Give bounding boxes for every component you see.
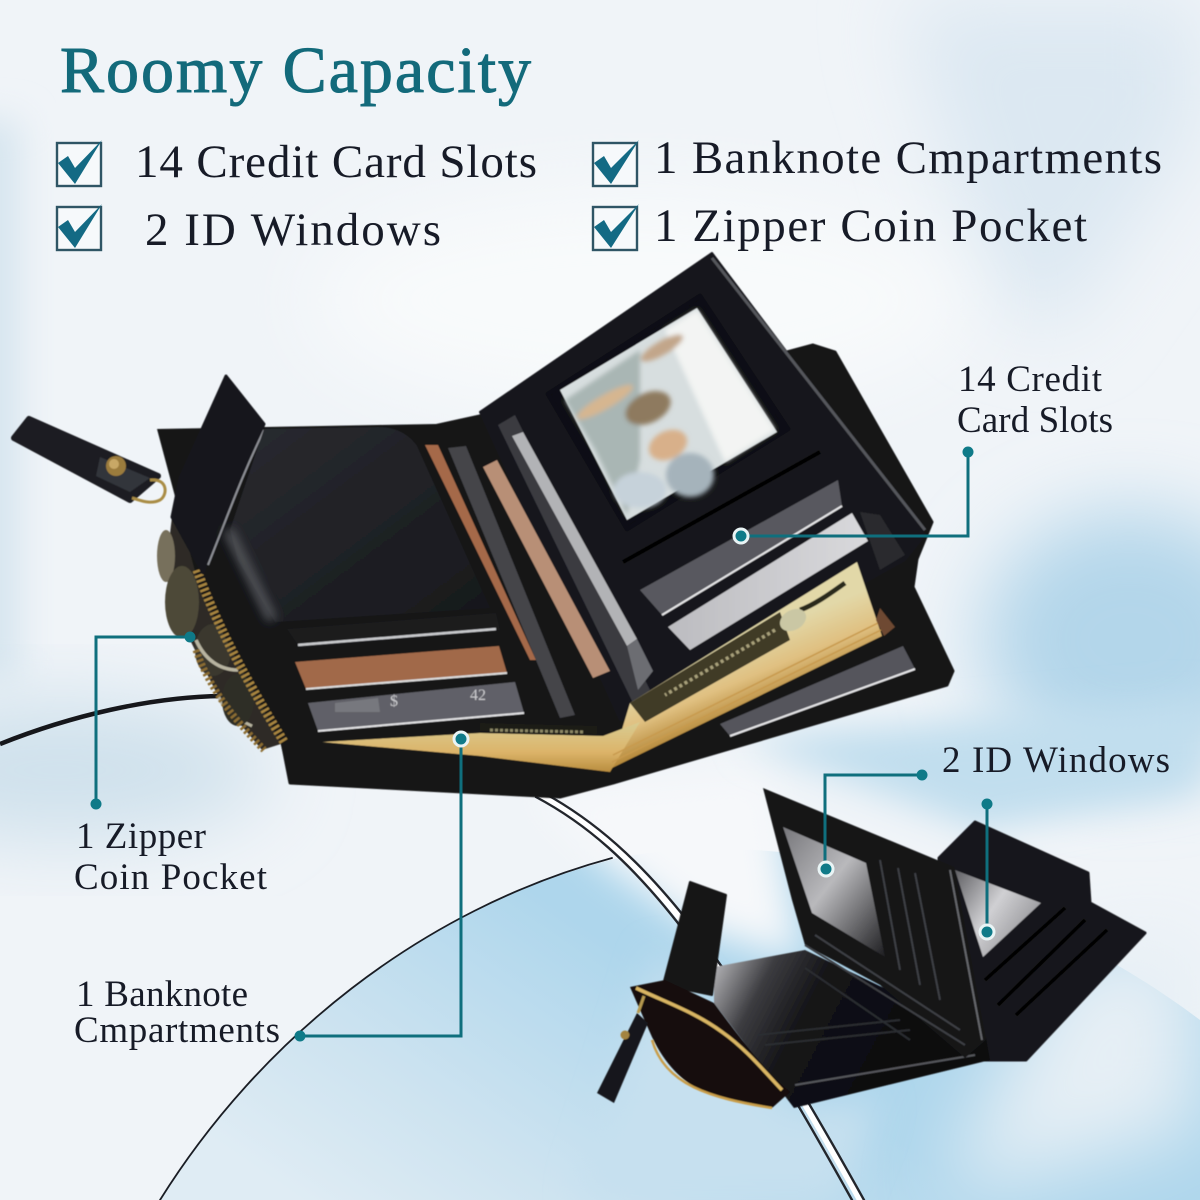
left cards — [287, 613, 524, 731]
checkbox: banknote compartments — [593, 140, 639, 186]
label: 14 Credit Card Slots: Card Slots — [957, 400, 1113, 441]
left cards: 42 — [470, 687, 486, 704]
left cards: $ — [390, 693, 398, 710]
back flap — [939, 822, 1145, 1060]
checkbox: zipper coin pocket — [593, 204, 639, 250]
flap — [172, 376, 264, 573]
callout: 2 ID windows — [819, 740, 1170, 939]
zipper pull tab — [14, 419, 165, 502]
right window — [955, 870, 1041, 957]
centre slots — [483, 415, 653, 705]
base slots — [758, 968, 975, 1085]
callout: 14 credit card slots — [734, 359, 1113, 543]
label: 1 Zipper Coin Pocket: Coin Pocket — [74, 857, 268, 898]
ID window with photo — [548, 296, 788, 529]
base panel — [714, 950, 990, 1108]
main open wallet — [14, 253, 953, 797]
banknotes — [322, 562, 895, 772]
label: 14 Credit Card Slots: 14 Credit — [958, 359, 1103, 400]
zip tab — [597, 996, 648, 1103]
coins — [157, 517, 287, 750]
lower right card — [720, 646, 915, 736]
label: 2 ID Windows: 2 ID Windows — [942, 740, 1170, 781]
upright panel — [763, 788, 986, 1058]
callout: banknote compartments — [74, 732, 468, 1051]
feature: 14 Credit Card Slots: 14 Credit Card Slots — [135, 136, 537, 188]
arc lines — [160, 793, 864, 1200]
right panel — [480, 253, 925, 722]
right flap — [282, 345, 953, 797]
checkbox: credit card slots — [57, 140, 102, 186]
label: 1 Zipper Coin Pocket: 1 Zipper — [76, 816, 206, 857]
title: Roomy Capacity — [60, 34, 531, 107]
label: 1 Banknote Cmpartments: 1 Banknote — [76, 974, 248, 1015]
tall flap — [663, 882, 726, 995]
checkbox: ID windows — [57, 204, 102, 250]
label: 1 Banknote Cmpartments: Cmpartments — [74, 1010, 280, 1051]
feature: 1 Banknote Cmpartments: 1 Banknote Cmpartments — [654, 132, 1162, 184]
back panel — [157, 410, 660, 797]
left inner pad — [230, 427, 490, 622]
cord — [0, 696, 222, 744]
zip pocket — [630, 980, 790, 1108]
right cards and slots — [623, 452, 905, 650]
feature: 2 ID Windows: 2 ID Windows — [145, 204, 441, 256]
left side slots — [425, 445, 575, 718]
feature checklist — [57, 132, 1162, 256]
folded second wallet — [597, 788, 1145, 1108]
feature: 1 Zipper Coin Pocket: 1 Zipper Coin Pocket — [654, 200, 1087, 252]
zipper teeth — [196, 570, 284, 750]
callout: zipper coin pocket — [74, 632, 268, 898]
back slots — [985, 908, 1107, 1015]
